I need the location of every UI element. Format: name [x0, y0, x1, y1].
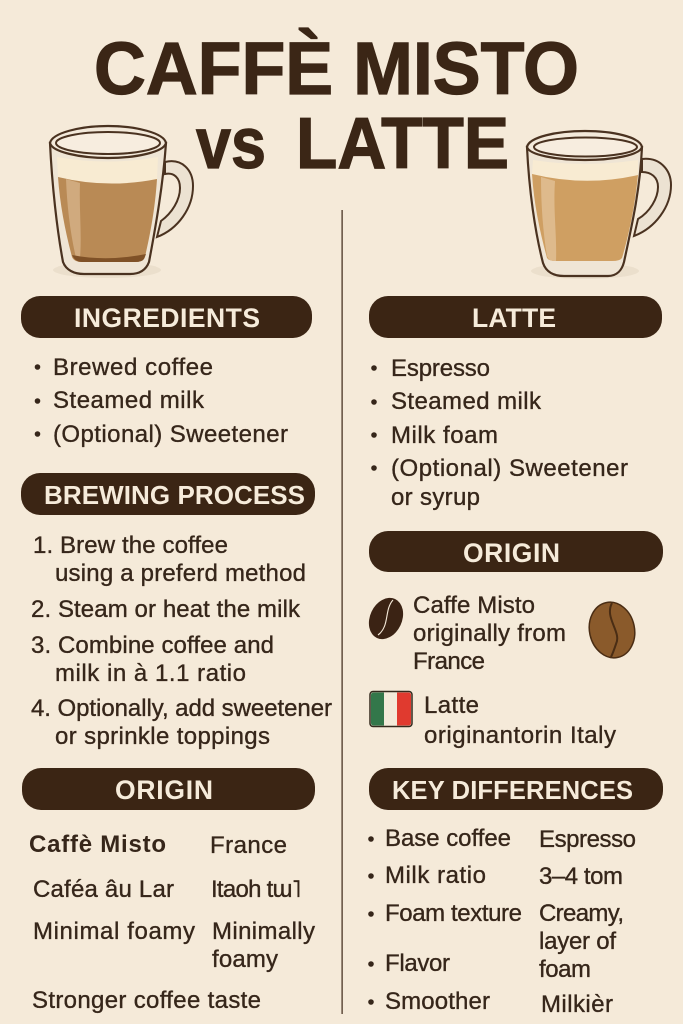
text: latte origin: Latte — [424, 692, 479, 719]
icon: Italian flag — [370, 692, 412, 726]
list: latte ingredients: Steamed milk — [391, 388, 542, 415]
table: key differences: 3–4 tom — [539, 863, 623, 890]
list: brewing steps: 4. Optionally, add sweetener — [31, 695, 332, 722]
list: brewing steps — [31, 532, 332, 750]
list: brewing steps: 2. Steam or heat the milk — [31, 596, 301, 623]
table: origin comparison: France — [210, 832, 287, 859]
heading: origin — [22, 768, 315, 810]
table: key differences: Smoother — [385, 988, 490, 1015]
title — [94, 27, 579, 184]
title: LATTE — [296, 104, 509, 184]
list: brewing steps: 3. Combine coffee and — [31, 632, 274, 659]
list: ingredients: Steamed milk — [53, 387, 205, 414]
table: key differences: Milkièr — [541, 991, 613, 1018]
list: latte ingredients: (Optional) Sweetener — [391, 455, 628, 482]
text: caffè misto origin: originally from — [413, 620, 566, 647]
panel: origin (right) — [362, 531, 663, 749]
table: key differences: layer of — [539, 928, 616, 955]
heading: origin: ORIGIN — [115, 775, 213, 805]
heading: ingredients: INGREDIENTS — [74, 303, 260, 333]
list: latte ingredients: or syrup — [391, 484, 480, 511]
table: key differences: Base coffee — [385, 825, 511, 852]
title: vs — [196, 104, 266, 184]
list: brewing steps: or sprinkle toppings — [55, 723, 270, 750]
heading: brewing process — [21, 473, 315, 515]
list: latte ingredients — [371, 355, 628, 511]
heading: origin: ORIGIN — [463, 538, 560, 568]
panel: key differences — [368, 768, 663, 1018]
icon: latte mug — [527, 131, 671, 279]
table: origin comparison: Caffè Misto — [29, 831, 166, 858]
table: origin comparison: Stronger coffee taste — [32, 987, 261, 1014]
icon: brown coffee bean — [584, 598, 640, 662]
icon: caffè misto mug — [50, 126, 193, 278]
panel: ingredients — [21, 296, 312, 448]
table: key differences — [368, 825, 636, 1018]
text: caffè misto origin — [413, 592, 566, 675]
table: key differences: Creamy, — [539, 900, 624, 927]
text: caffè misto origin: Caffe Misto — [413, 592, 535, 619]
heading: brewing process: BREWING PROCESS — [44, 480, 305, 510]
list: brewing steps: using a preferd method — [55, 560, 306, 587]
table: key differences: foam — [539, 956, 591, 983]
icon: dark coffee bean — [362, 592, 410, 645]
panel: origin comparison (left) — [22, 768, 315, 1014]
heading: origin — [369, 531, 663, 572]
table: origin comparison — [29, 831, 315, 1014]
list: brewing steps: 1. Brew the coffee — [33, 532, 228, 559]
table: origin comparison: Caféa âu Lar — [33, 876, 174, 903]
table: key differences: Foam texture — [385, 900, 522, 927]
table: origin comparison: foamy — [212, 946, 278, 973]
heading: ingredients — [21, 296, 312, 338]
table: key differences: Flavor — [385, 950, 450, 977]
list: latte ingredients: Milk foam — [391, 422, 498, 449]
list: ingredients: (Optional) Sweetener — [53, 421, 288, 448]
heading: key differences — [369, 768, 663, 810]
text: caffè misto origin: France — [413, 648, 485, 675]
table: key differences: Espresso — [539, 826, 636, 853]
table: origin comparison: Itaoh tɯ˥ — [211, 876, 301, 903]
title: CAFFÈ MISTO — [94, 27, 579, 110]
list: latte ingredients: Espresso — [391, 355, 490, 382]
list: ingredients — [35, 354, 288, 448]
heading: latte: LATTE — [472, 303, 556, 333]
list: brewing steps: milk in à 1.1 ratio — [55, 660, 246, 687]
text: latte origin: originantorin Italy — [424, 722, 616, 749]
table: key differences: Milk ratio — [385, 862, 486, 889]
table: origin comparison: Minimal foamy — [33, 918, 195, 945]
heading: key differences: KEY DIFFERENCES — [392, 777, 633, 805]
list: ingredients: Brewed coffee — [53, 354, 213, 381]
panel: latte ingredients — [369, 296, 662, 511]
table: origin comparison: Minimally — [212, 918, 315, 945]
text: latte origin — [424, 692, 616, 749]
heading: latte — [369, 296, 662, 338]
panel: brewing process — [21, 473, 332, 750]
